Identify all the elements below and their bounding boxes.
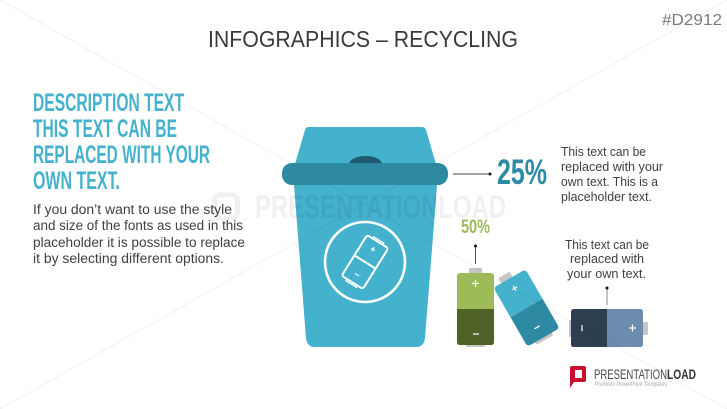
navy battery xyxy=(569,309,648,347)
title: INFOGRAPHICS – RECYCLING xyxy=(208,26,518,52)
stat: 50%: 50% xyxy=(461,217,490,238)
watermark: PRESENTATIONLOAD xyxy=(255,189,506,225)
product code: #D2912 xyxy=(662,12,722,29)
text block: 25% description: placeholder text. xyxy=(561,190,652,204)
text block: battery description: your own text. xyxy=(567,267,646,281)
connector: 25% xyxy=(453,172,492,176)
green battery xyxy=(457,268,494,347)
heading: description text: DESCRIPTION TEXT xyxy=(33,89,184,117)
connector: 50% xyxy=(474,244,477,264)
logo wordmark bold: LOAD xyxy=(667,367,696,382)
bin rim xyxy=(282,163,448,185)
heading: description text: THIS TEXT CAN BE xyxy=(33,115,177,143)
text block: battery description xyxy=(565,238,649,281)
heading: description text: REPLACED WITH YOUR xyxy=(33,141,210,169)
heading: description text: OWN TEXT. xyxy=(33,167,120,195)
bin handle xyxy=(349,156,382,164)
logo wordmark: PRESENTATION xyxy=(594,367,667,382)
recycling bin xyxy=(282,127,448,347)
text block: 25% description: replaced with your xyxy=(561,160,663,174)
logo tagline: Premium PowerPoint Templates xyxy=(595,381,668,388)
teal tilted battery xyxy=(490,264,561,349)
connector: navy battery xyxy=(606,286,608,305)
body text: and size of the fonts as used in this xyxy=(33,218,243,233)
body text: If you don’t want to use the style xyxy=(33,202,232,217)
text block: 25% description xyxy=(561,145,663,204)
logo: PresentationLoad xyxy=(570,366,696,388)
text block: battery description: replaced with xyxy=(570,252,644,266)
body text xyxy=(33,202,245,266)
stat: 25%: 25% xyxy=(497,153,547,192)
text block: 25% description: This text can be xyxy=(561,145,646,159)
bin body xyxy=(294,185,437,347)
heading: description text xyxy=(33,89,210,195)
text block: battery description: This text can be xyxy=(565,238,649,252)
icon: battery in circle xyxy=(325,222,405,302)
bin lid xyxy=(295,127,436,164)
text block: 25% description: own text. This is a xyxy=(561,175,658,189)
logo mark xyxy=(570,366,586,388)
body text: placeholder it is possible to replace xyxy=(33,235,245,250)
body text: it by selecting different options. xyxy=(33,251,224,266)
